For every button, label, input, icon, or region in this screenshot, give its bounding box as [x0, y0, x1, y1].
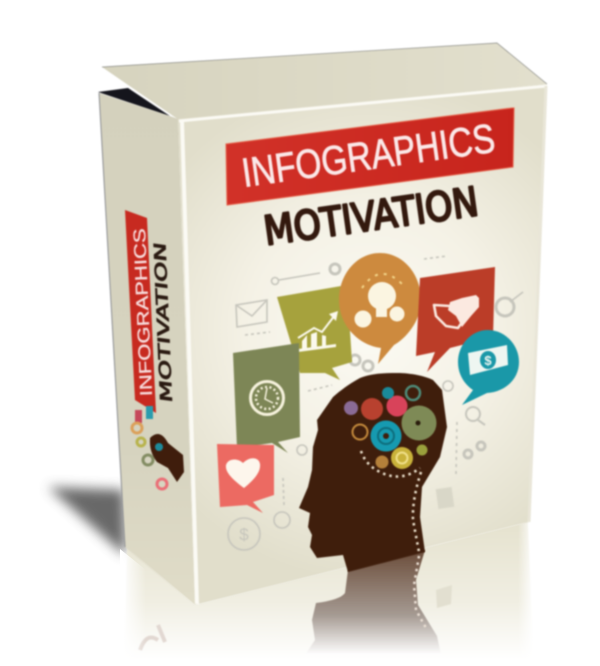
floor shadow: [48, 487, 126, 556]
icon: ring left: [297, 445, 307, 455]
icon: ring lower: [274, 512, 290, 528]
floor reflection: [124, 522, 534, 664]
icon: handshake cuff: [434, 305, 465, 328]
bubble: growth chart: [277, 285, 352, 380]
icon: arrow link: [272, 273, 320, 284]
gear: yellow: [391, 447, 413, 469]
title: infographics: INFOGRAPHICS: [239, 115, 498, 196]
front right edge: [529, 86, 546, 522]
icon: dollar sign: $: [484, 353, 492, 368]
bubble: money: [458, 330, 519, 405]
side banner text: INFOGRAPHICS: [130, 228, 156, 397]
icon: banknote: [468, 345, 508, 375]
side motivation text: MOTIVATION: [150, 241, 176, 404]
title banner: [226, 108, 514, 205]
reflected grey icon: [436, 585, 452, 608]
icon: ring: [443, 381, 453, 391]
icon: magnifier: [466, 407, 485, 425]
open flap dark gap: [98, 88, 170, 116]
icon: handshake hand: [448, 295, 479, 327]
side logo gears: [155, 443, 163, 451]
top flap: [102, 43, 547, 120]
floor left fade: [120, 549, 146, 666]
icon: bulb rays: [362, 274, 402, 288]
side panel: [99, 93, 195, 605]
gear: small teal: [382, 387, 394, 399]
reflected spine dots: [414, 556, 426, 628]
icon: folder: [436, 487, 454, 509]
icon: envelope: [236, 300, 267, 327]
floor right fade: [518, 520, 536, 666]
icon: spine arrow: [456, 422, 457, 475]
side logo head: [150, 434, 184, 482]
bubble: clock: [233, 343, 300, 453]
gear: pink: [386, 396, 408, 416]
icon: small link: [245, 332, 270, 335]
gear: small green: [416, 444, 428, 456]
icon: small arrow: [308, 385, 332, 391]
spine dots: [361, 451, 421, 552]
reflected side logo: [140, 625, 165, 650]
front title: [226, 108, 514, 255]
gear: small orange: [376, 456, 388, 468]
grey background icons: [228, 256, 523, 550]
icon: gear pair: [464, 442, 485, 458]
speech bubbles: [217, 253, 519, 513]
side logo bubbles: [132, 406, 167, 489]
gear: large teal: [370, 420, 402, 452]
reflected head silhouette: [305, 550, 441, 655]
icon: dollar coin: $: [239, 525, 249, 544]
icon: target: [496, 292, 523, 316]
side logo: [132, 406, 184, 489]
icon: light bulbs: [354, 282, 404, 328]
icon: gear: [330, 264, 340, 274]
side title: [125, 210, 184, 489]
gear: ring teal-green: [406, 386, 420, 400]
icon: small arrows lower: [283, 478, 284, 505]
gear: large green: [402, 406, 436, 440]
icon: clock: [250, 382, 284, 414]
front panel: [178, 84, 547, 605]
icon: dollar coin: [228, 518, 260, 550]
icon: small gears: [350, 355, 373, 371]
bubble: idea: [339, 253, 421, 364]
front top highlight: [179, 86, 547, 121]
gear: purple: [344, 401, 358, 415]
front left highlight: [182, 121, 197, 604]
gear: orange ring: [352, 424, 368, 440]
side panel left edge: [99, 93, 125, 547]
icon: chart: [298, 311, 338, 352]
icon: heart: [226, 458, 260, 488]
top flap outline: [102, 43, 547, 84]
gear: red: [361, 398, 383, 420]
box body: [98, 43, 547, 605]
side red banner: [125, 210, 156, 413]
bubble: heart: [217, 444, 274, 513]
title: motivation: MOTIVATION: [261, 179, 481, 255]
icon: dots arrow: [424, 256, 447, 259]
head silhouette: [299, 373, 447, 572]
bubble: handshake: [416, 267, 495, 372]
